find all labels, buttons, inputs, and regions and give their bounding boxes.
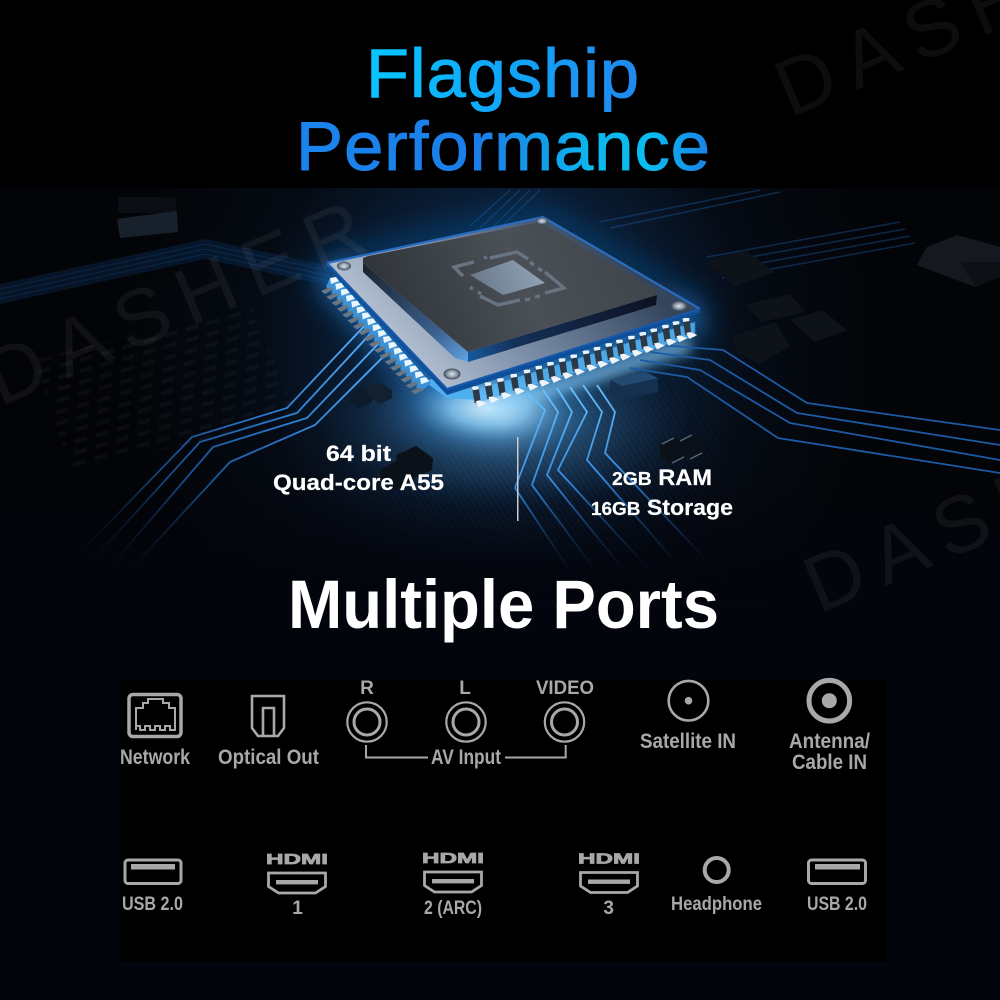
icon: optical port [252,696,284,736]
spec: CPU: 64 bit [326,441,392,466]
board hatch texture [338,355,748,608]
icon: HDMI 3 [578,852,640,892]
icon: HDMI 2 [422,851,484,892]
icon: network port [129,694,181,736]
bracket: AV input [366,745,566,758]
title: Flagship Performance: Performance [296,108,711,185]
label: USB left: USB 2.0 [122,894,183,915]
panel: ports [120,678,886,962]
icon: HDMI 1 [266,852,328,893]
spec: memory: 2GB RAM [612,465,712,490]
small dark components right of chip [705,250,847,364]
die left side [363,263,468,362]
icon: HDMI 3: HDMI [578,852,640,868]
faint ribbon band upper left [0,239,330,304]
icon: RCA L [446,702,486,742]
small ICs above RAM [660,435,704,464]
circuit board photo panel [0,188,1000,608]
lit base under package [425,375,480,400]
spec: memory [591,465,733,520]
right pin row [472,318,697,407]
label: R: R [360,678,374,699]
icon: USB left [125,860,181,884]
chip package [321,217,700,407]
icon: headphone jack [705,858,729,882]
label: L: L [459,678,471,699]
component top right [917,235,1000,287]
title: Flagship Performance: Flagship [366,35,640,112]
faint component grid left [35,305,300,470]
divider [517,437,518,521]
watermarks [0,0,1000,630]
label: Antenna/Cable IN [789,730,870,774]
spec: CPU [273,441,444,495]
label: Network: Network [120,746,190,769]
die right side [468,295,657,362]
title: Flagship Performance [296,35,711,185]
substrate blue rim [327,217,700,309]
die emblem centre [470,260,545,295]
icon: RCA video [545,702,584,742]
spec: CPU: Quad-core A55 [273,470,444,495]
small ICs upper left of text [350,382,392,408]
label: Antenna/Cable IN: Cable IN [792,751,867,774]
label: HDMI 1: 1 [292,898,303,919]
label: Satellite IN: Satellite IN [640,730,736,753]
icon: USB right [808,860,866,884]
label: HDMI 2 ARC: 2 (ARC) [424,898,482,919]
label: Optical Out: Optical Out [218,746,319,769]
wide pale haze under chip [320,340,690,510]
label: HDMI 3: 3 [603,898,614,919]
icon: HDMI 2: HDMI [422,851,484,867]
label: Antenna/Cable IN: Antenna/ [789,730,870,753]
faint ribbon traces top [470,190,915,278]
left trace bundle [80,322,388,567]
icon: RCA R [347,702,387,742]
right trace bundle [630,345,1000,473]
right pin glow [470,322,695,402]
die emblem dashed outline [454,252,564,305]
label: VIDEO: VIDEO [536,678,594,699]
label: USB right: USB 2.0 [807,894,867,915]
bright light beneath chip [360,350,620,466]
label: AV Input: AV Input [431,746,501,769]
heading: Multiple Ports: Multiple Ports [288,566,719,643]
small blue component under chip [610,372,658,400]
icon: antenna [809,680,850,721]
bottom fade [0,480,1000,601]
left pin row [321,277,431,394]
corner screws [337,218,687,380]
light strip under right pins [485,345,690,410]
icon: satellite [669,681,708,720]
spec: memory: 16GB Storage [591,495,733,520]
substrate edge [327,263,700,395]
component top left [117,197,178,238]
bottom trace bundle [515,385,735,590]
label: Headphone: Headphone [671,894,762,915]
small ICs behind 64 bit [380,446,433,490]
blue glow around chip [327,217,700,396]
icon: HDMI 1: HDMI [266,852,328,868]
die top [363,222,657,352]
substrate top [327,217,700,389]
